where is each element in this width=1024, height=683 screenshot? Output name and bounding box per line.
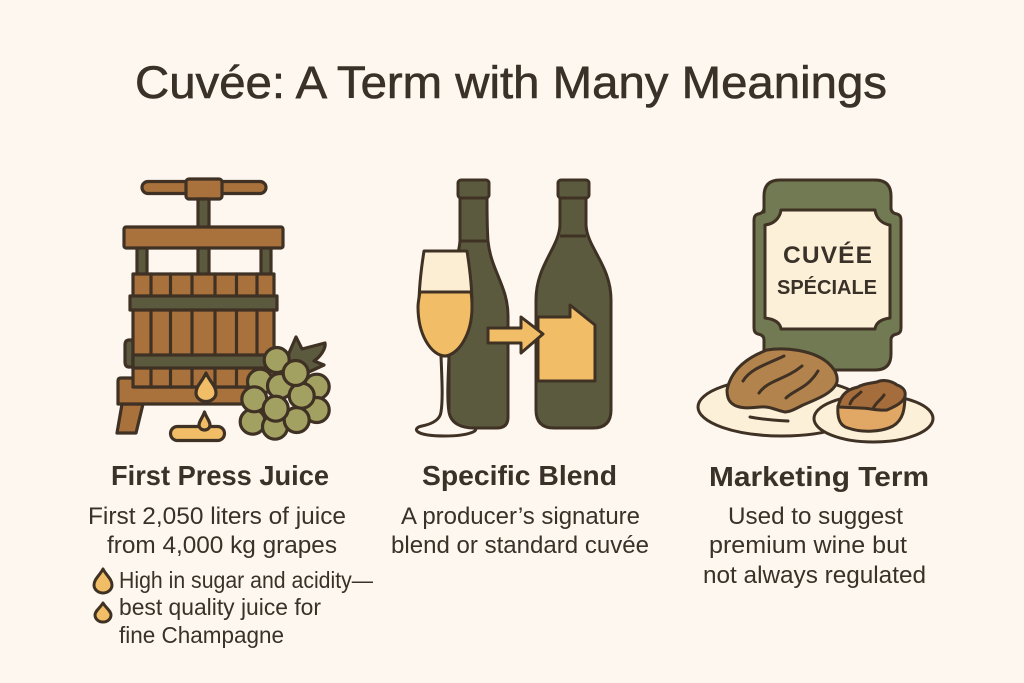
small plate <box>814 395 933 442</box>
column 1 text: first press juice <box>88 460 373 648</box>
heading: First Press Juice <box>111 460 329 491</box>
arrow <box>488 317 543 353</box>
column 3 text: marketing term <box>703 461 929 589</box>
description: not always regulated <box>703 562 926 589</box>
grape leaf <box>287 337 325 375</box>
label text: cuvée: CUVÉE <box>783 241 872 269</box>
description <box>88 503 346 559</box>
bullet drop icons <box>94 569 112 622</box>
press base and leg <box>117 378 253 433</box>
description <box>703 503 926 589</box>
description: Used to suggest <box>728 503 903 530</box>
large bread loaf <box>727 349 837 421</box>
description: A producer’s signature <box>401 503 640 530</box>
heading: Marketing Term <box>709 461 929 492</box>
icon: wine glass, bottles and arrow <box>416 180 611 436</box>
description: from 4,000 kg grapes <box>107 532 337 559</box>
juice drops and puddle <box>170 373 224 440</box>
description: First 2,050 liters of juice <box>88 503 346 530</box>
heading: Specific Blend <box>422 460 617 491</box>
description: blend or standard cuvée <box>391 532 649 559</box>
back bottle <box>449 180 508 428</box>
champagne glass <box>416 251 476 436</box>
green label backdrop <box>754 180 901 370</box>
press screw and posts <box>125 199 271 367</box>
bullet text: High in sugar and acidity— <box>119 567 373 593</box>
description: premium wine but <box>709 532 907 559</box>
bullet text: best quality juice for <box>119 594 321 620</box>
press top beam <box>124 227 283 248</box>
description <box>391 503 649 559</box>
label text: spéciale: SPÉCIALE <box>777 276 877 299</box>
press barrel <box>133 274 274 387</box>
barrel bands <box>130 296 277 368</box>
column 2 text: specific blend <box>391 460 649 559</box>
bullet text: fine Champagne <box>119 622 284 648</box>
icon: wine press with grapes <box>117 179 329 440</box>
cream label <box>765 210 890 329</box>
bullet text <box>119 567 373 648</box>
title: Cuvée: A Term with Many Meanings <box>135 57 887 108</box>
icon: labelled bottle and food plates <box>698 180 933 442</box>
bottle label <box>538 305 595 381</box>
front bottle <box>536 180 611 428</box>
small bread <box>838 381 905 431</box>
large plate <box>698 378 866 436</box>
grape cluster <box>240 348 329 439</box>
press handle <box>142 179 266 199</box>
